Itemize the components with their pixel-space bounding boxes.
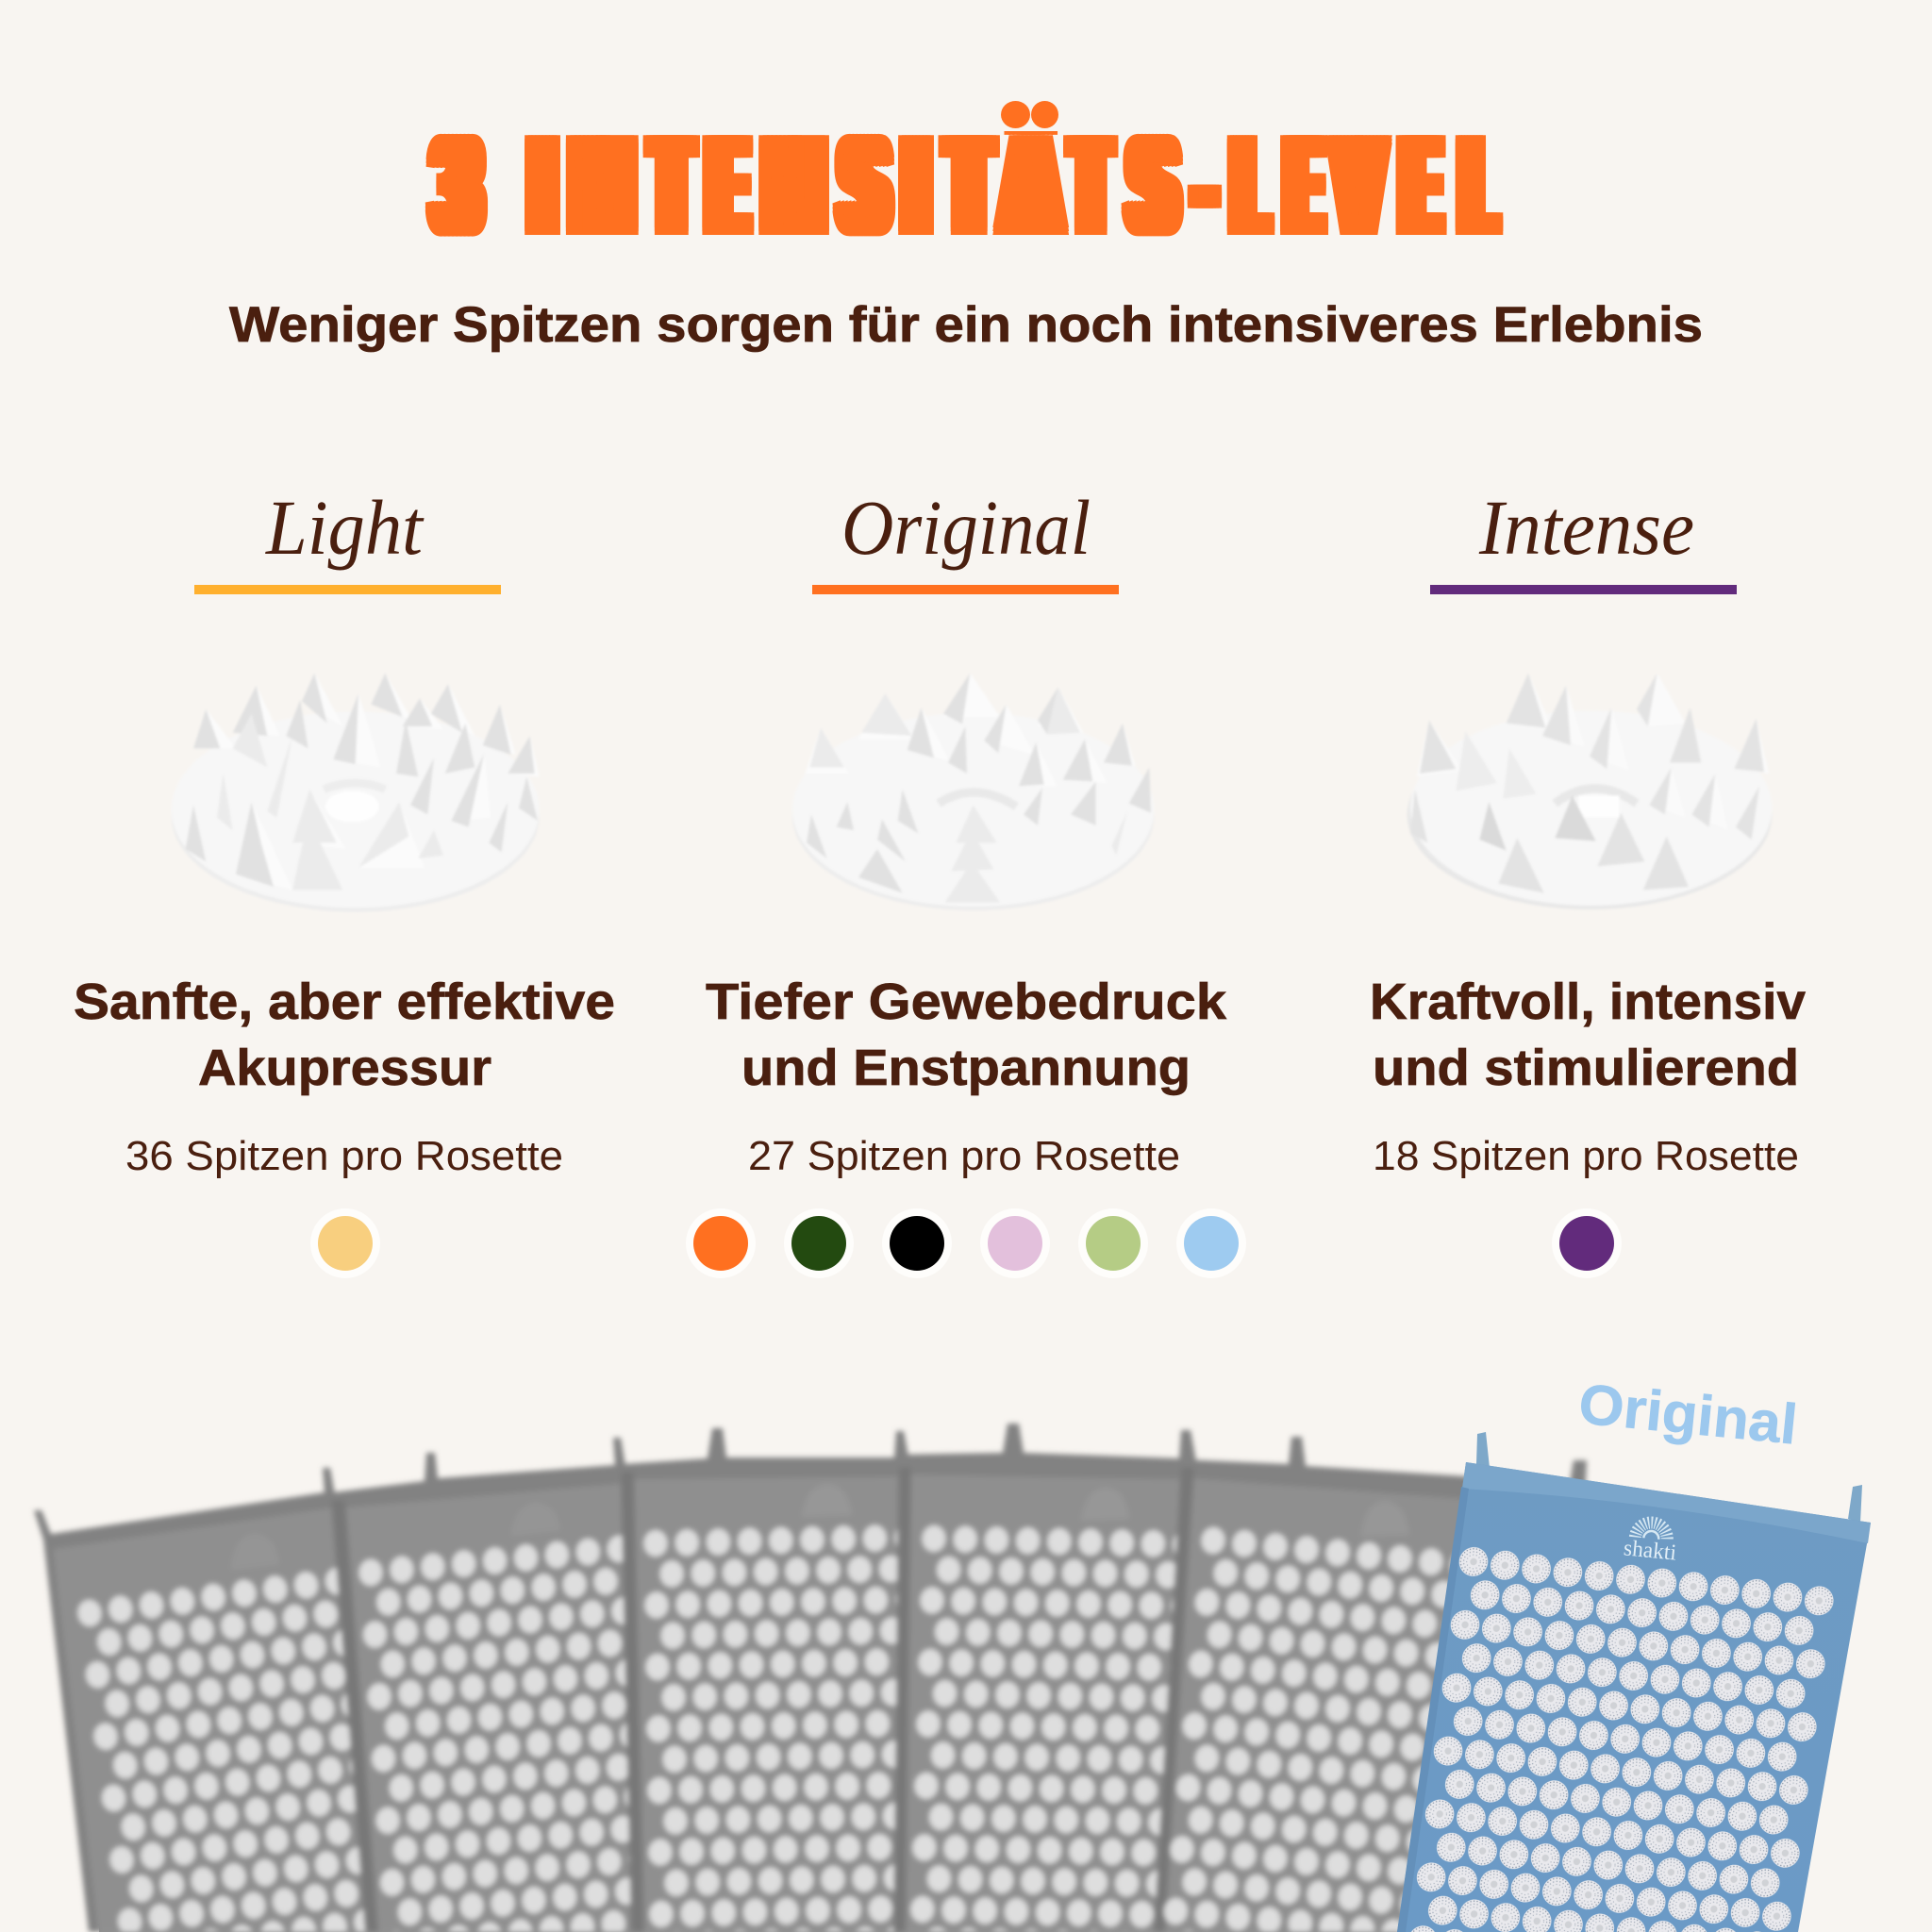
colour swatch: purple — [1552, 1208, 1622, 1278]
underline: Intense — [1430, 585, 1737, 594]
title: Ä — [1008, 110, 1055, 260]
title: E — [1289, 110, 1319, 260]
heading: Intense: Intense — [1478, 484, 1694, 571]
title: T — [952, 110, 986, 260]
heading: benefit Original: Tiefer Gewebedruck — [706, 974, 1227, 1030]
title: S — [845, 110, 883, 260]
blue acupressure mat — [1397, 1432, 1871, 1932]
icon: rosette with 18 spikes — [1407, 673, 1772, 909]
icon: rosette with 27 spikes — [792, 673, 1154, 910]
logo: shakti — [1623, 1520, 1679, 1566]
panel: Intense — [1370, 484, 1806, 1278]
title: L — [1464, 110, 1492, 260]
underline: Light — [194, 585, 501, 594]
grey mat 5 — [1154, 1437, 1649, 1932]
heading: benefit Light — [74, 974, 615, 1096]
title: L — [1236, 110, 1264, 260]
spike count: Original: 27 Spitzen pro Rosette — [748, 1133, 1180, 1179]
underline: Original — [812, 585, 1119, 594]
heading: benefit Intense — [1370, 974, 1806, 1096]
title — [425, 101, 1504, 260]
title: N — [771, 110, 817, 260]
title: T — [656, 110, 688, 260]
heading: Light: Light — [265, 484, 425, 571]
mat rosettes — [1407, 1528, 1839, 1932]
colour swatch: yellow — [310, 1208, 380, 1278]
icon: rosette with 36 spikes — [172, 673, 540, 912]
heading: Original: Original — [841, 484, 1091, 571]
title: I — [908, 110, 924, 260]
title: T — [1075, 110, 1107, 260]
subtitle: Weniger Spitzen sorgen für ein noch intensiveres Erlebnis — [229, 297, 1703, 353]
title: E — [1405, 110, 1437, 260]
title: N — [578, 110, 626, 260]
logo: shakti: shakti — [1623, 1536, 1677, 1566]
grey mat 1 — [34, 1468, 445, 1932]
heading: benefit Intense: und stimulierend — [1373, 1040, 1799, 1096]
heading: benefit Intense: Kraftvoll, intensiv — [1370, 974, 1806, 1030]
title: E — [711, 110, 743, 260]
title: V — [1340, 110, 1378, 260]
heading: benefit Original: und Enstpannung — [741, 1040, 1191, 1096]
spike count: Intense: 18 Spitzen pro Rosette — [1373, 1133, 1799, 1179]
heading: benefit Light: Sanfte, aber effektive — [74, 974, 615, 1030]
colour swatches: six colours — [686, 1208, 1246, 1278]
heading: benefit Light: Akupressur — [198, 1040, 491, 1096]
grey mat 4 — [893, 1424, 1216, 1932]
title: S — [1134, 110, 1172, 260]
title: - — [1197, 110, 1212, 260]
panel: Light — [74, 484, 615, 1278]
mat hem — [1462, 1462, 1871, 1543]
label: Original: Original — [1576, 1372, 1800, 1457]
heading: benefit Original — [706, 974, 1227, 1096]
grey mat 3 — [621, 1428, 974, 1932]
mat darker edge — [1397, 1487, 1469, 1932]
title: I — [535, 110, 550, 260]
title: 3 — [440, 110, 475, 260]
spike count: Light: 36 Spitzen pro Rosette — [125, 1133, 563, 1179]
mat body — [1397, 1462, 1871, 1932]
blurred grey mats — [34, 1424, 1649, 1932]
panel: Original — [686, 484, 1246, 1278]
grey mat 2 — [331, 1438, 708, 1932]
mat tabs — [1476, 1432, 1862, 1523]
